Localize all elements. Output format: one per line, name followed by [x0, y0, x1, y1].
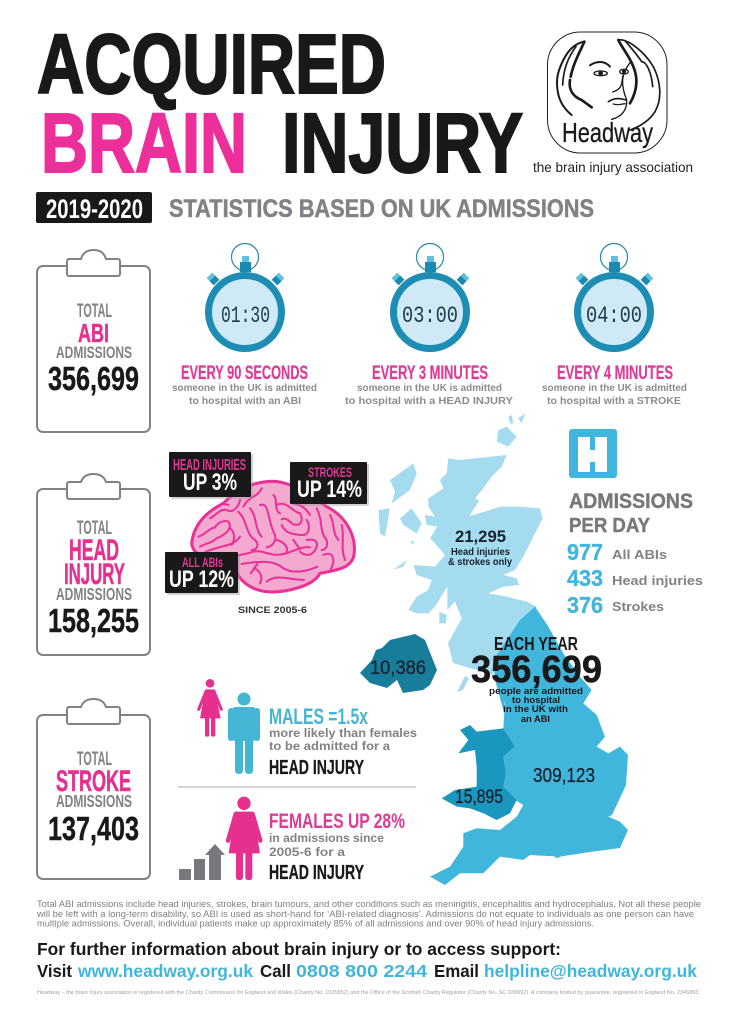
subtitle: STATISTICS BASED ON UK ADMISSIONS: [169, 195, 594, 223]
icon: large female figure: [228, 797, 260, 880]
text: males 1.5x: HEAD INJURY: [269, 757, 364, 779]
text: since 2005-6: SINCE 2005-6: [238, 605, 307, 616]
text: males 1.5x: more likely than females: [269, 726, 417, 740]
footnote: Total ABI admissions include head injuries, strokes, brain tumours, and other conditions such as meningitis, encephalitis and hydrocephalus. Not all these people: [37, 899, 701, 909]
stat box: strokes up 14%: UP 14%: [297, 476, 362, 503]
label: Scotland: & strokes only: [448, 557, 512, 568]
icon: brain: [192, 481, 354, 592]
panel: total head injury clipboard: HEAD: [69, 534, 119, 567]
stat box: all ABIs up 12%: [165, 552, 240, 595]
icon: small female figure: [199, 679, 221, 737]
panel: total stroke clipboard: [37, 699, 150, 879]
callout: each year: EACH YEAR: [494, 634, 578, 654]
callout: each year: an ABI: [521, 714, 550, 725]
logo: Headway: Headway: [562, 117, 653, 148]
text: females up 28%: HEAD INJURY: [269, 862, 364, 884]
panel: admissions per day: 977: [567, 539, 603, 565]
stat box: all ABIs up 12%: ALL ABIs: [182, 554, 223, 570]
text: every 90 seconds: [172, 362, 317, 407]
text: males 1.5x: MALES =1.5x: [269, 704, 369, 729]
contact information: For further information about brain injury or to access support:: [37, 939, 561, 959]
text: males 1.5x: [269, 704, 417, 779]
contact information: www.headway.org.uk: [77, 961, 253, 981]
text: females up 28%: 2005-6 for a: [269, 845, 345, 859]
panel: total ABI clipboard: ADMISSIONS: [56, 343, 132, 362]
map: Isle of Man: [457, 676, 469, 692]
stat box: all ABIs up 12%: UP 12%: [169, 566, 234, 593]
panel: admissions per day: 376: [567, 592, 603, 618]
icon: stopwatch 04:00: [576, 244, 653, 348]
label: Wales: 15,895: [455, 787, 503, 808]
panel: admissions per day: 433: [567, 565, 603, 591]
panel: total head injury clipboard: 158,255: [48, 602, 139, 639]
panel: admissions per day: Head injuries: [612, 573, 703, 588]
title: [37, 17, 523, 190]
panel: admissions per day: Strokes: [612, 599, 664, 614]
text: females up 28%: FEMALES UP 28%: [269, 810, 405, 833]
text: every 90 seconds: EVERY 90 SECONDS: [181, 362, 308, 384]
icon: stopwatch 03:00: 03:00: [402, 303, 458, 329]
text: every 4 minutes: [542, 362, 687, 407]
panel: total stroke clipboard: 137,403: [48, 810, 139, 847]
footnote: multiple admissions. Overall, individual patients make up approximately 85% of all admissions and over 90% of head injury admissions.: [37, 918, 594, 928]
panel: total ABI clipboard: ABI: [78, 318, 109, 348]
panel: admissions per day: [567, 490, 703, 618]
label: Northern Ireland: 10,386: [370, 658, 426, 679]
label: Scotland: 21,295: [455, 527, 506, 546]
panel: admissions per day: ADMISSIONS: [569, 490, 693, 513]
icon: stopwatch 01:30: [207, 244, 284, 348]
legal small print: Headway – the brain injury association is registered with the Charity Commission for England and Wales (Charity No. 1025852) and the Office of the Scottish Charity Regulator (Charity No. SC 039992). A company limited by guarantee, registered in England No. 2346893.: [37, 990, 700, 996]
contact information: Call: [260, 961, 291, 981]
year badge: 2019-2020: [46, 194, 143, 224]
title: INJURY: [282, 96, 523, 190]
logo: Headway: [533, 32, 693, 175]
footnote: [36, 899, 701, 928]
stat box: head injuries up 3%: [169, 452, 253, 499]
contact information: 0808 800 2244: [296, 961, 427, 981]
text: every 4 minutes: EVERY 4 MINUTES: [557, 362, 673, 384]
icon: stopwatch 04:00: 04:00: [586, 303, 642, 329]
callout: each year: 356,699: [471, 649, 602, 691]
panel: total head injury clipboard: TOTAL: [77, 518, 112, 539]
panel: admissions per day: PER DAY: [569, 515, 651, 537]
text: females up 28%: [269, 810, 405, 884]
panel: total head injury clipboard: ADMISSIONS: [56, 584, 132, 604]
contact information: Visit: [37, 961, 72, 981]
icon: stopwatch 01:30: 01:30: [221, 303, 270, 329]
label: Scotland: [448, 527, 512, 568]
logo: Headway: the brain injury association: [533, 159, 693, 175]
text: every 4 minutes: to hospital with a STROKE: [547, 395, 681, 407]
map: Northern Ireland: [360, 634, 437, 693]
text: every 3 minutes: to hospital with a HEAD INJURY: [345, 395, 513, 407]
title: BRAIN: [41, 96, 247, 190]
stat box: head injuries up 3%: HEAD INJURIES: [173, 457, 246, 474]
panel: total stroke clipboard: TOTAL: [77, 749, 112, 770]
label: England: 309,123: [533, 765, 595, 787]
text: males 1.5x: to be admitted for a: [269, 739, 390, 753]
icon: hospital sign: [569, 429, 617, 478]
text: every 90 seconds: someone in the UK is admitted: [172, 382, 317, 394]
text: every 3 minutes: [345, 362, 513, 407]
contact information: Email: [434, 961, 479, 981]
panel: total stroke clipboard: ADMISSIONS: [56, 791, 132, 811]
footnote: will be left with a long-term disability, so ABI is used as short-hand for ‘ABI-related diagnosis’. Admissions do not equate to individuals as one person can have: [36, 909, 694, 919]
text: every 90 seconds: to hospital with an ABI: [189, 395, 301, 407]
text: every 3 minutes: EVERY 3 MINUTES: [372, 362, 488, 384]
callout: each year: to hospital: [512, 695, 560, 706]
icon: male figure: [228, 692, 260, 774]
panel: total ABI clipboard: TOTAL: [77, 301, 112, 322]
icon: stopwatch 03:00: [392, 244, 469, 348]
text: every 4 minutes: someone in the UK is admitted: [542, 382, 687, 394]
stat box: strokes up 14%: [290, 462, 369, 506]
callout: each year: people are admitted: [489, 686, 583, 697]
callout: each year: in the UK with: [503, 704, 568, 715]
panel: total head injury clipboard: INJURY: [64, 558, 125, 591]
panel: total stroke clipboard: STROKE: [56, 765, 131, 798]
map: Scotland and northern England: [378, 413, 543, 675]
callout: each year: [471, 634, 602, 725]
contact information: helpline@headway.org.uk: [484, 961, 697, 981]
contact information: [37, 939, 697, 981]
panel: total ABI clipboard: 356,699: [48, 360, 139, 397]
title: ACQUIRED: [37, 17, 386, 111]
map: England: [430, 607, 628, 885]
panel: admissions per day: All ABIs: [612, 547, 667, 562]
label: Scotland: Head injuries: [451, 547, 510, 558]
panel: total ABI clipboard: [37, 250, 150, 432]
icon: rising bars: [179, 844, 225, 880]
text: every 3 minutes: someone in the UK is admitted: [357, 382, 502, 394]
panel: total head injury clipboard: [37, 474, 150, 655]
stat box: head injuries up 3%: UP 3%: [183, 469, 237, 496]
map: Wales: [442, 725, 517, 820]
map of the UK: [360, 413, 628, 885]
stat box: strokes up 14%: STROKES: [308, 464, 352, 480]
text: females up 28%: in admissions since: [269, 831, 384, 845]
